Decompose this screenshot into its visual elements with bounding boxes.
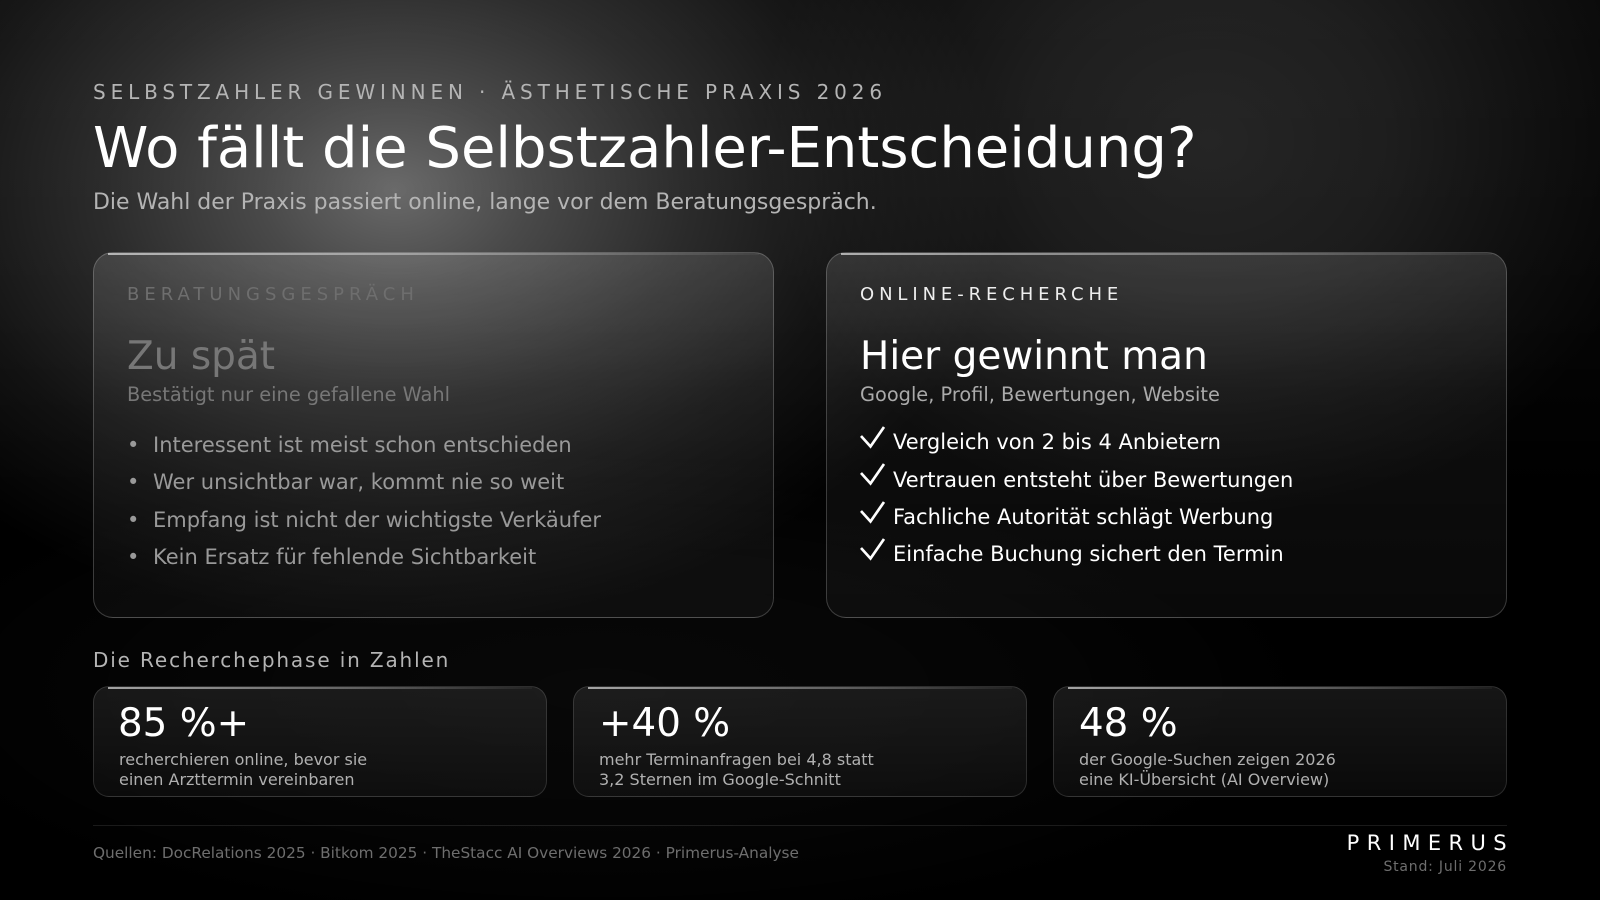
check item: Vergleich von 2 bis 4 Anbietern: [893, 430, 1221, 454]
check item: Vertrauen entsteht über Bewertungen: [893, 468, 1293, 492]
bullet item: Interessent ist meist schon entschieden: [153, 433, 572, 457]
title: Wo fällt die Selbstzahler-Entscheidung?: [93, 116, 1197, 181]
stat description: mehr Terminanfragen bei 4,8 statt: [599, 750, 874, 769]
subtitle: Die Wahl der Praxis passiert online, lange vor dem Beratungsgespräch.: [93, 190, 877, 215]
bullet item: Kein Ersatz für fehlende Sichtbarkeit: [153, 545, 536, 569]
stat description: der Google-Suchen zeigen 2026: [1079, 750, 1336, 769]
panel subheading: Bestätigt nur eine gefallene Wahl: [127, 383, 450, 406]
card highlight: [1068, 687, 1492, 689]
bullet item: •: [127, 433, 139, 457]
stat description: eine KI-Übersicht (AI Overview): [1079, 770, 1329, 789]
panel: Beratungsgespräch: [93, 252, 774, 618]
stat value: 85 %+: [118, 701, 249, 746]
stat description: 3,2 Sternen im Google-Schnitt: [599, 770, 841, 789]
stat value: 48 %: [1079, 701, 1178, 746]
brand: PRIMERUS: [1347, 831, 1514, 855]
eyebrow: SELBSTZAHLER GEWINNEN · ÄSTHETISCHE PRAXIS 2026: [93, 80, 887, 104]
bullet list: [127, 433, 601, 569]
card highlight: [108, 687, 532, 689]
panel label: ONLINE-RECHERCHE: [860, 284, 1123, 305]
stat value: +40 %: [599, 701, 730, 746]
stat description: [599, 750, 874, 789]
stat description: [1079, 750, 1336, 789]
check item: Fachliche Autorität schlägt Werbung: [893, 505, 1273, 529]
card highlight: [108, 253, 759, 255]
panel: Online-Recherche: [826, 252, 1507, 618]
stat card: 48 %: [1053, 686, 1507, 797]
stat card: +40 %: [573, 686, 1027, 797]
stat card: 85 %+: [93, 686, 547, 797]
bullet item: •: [127, 470, 139, 494]
date: Stand: Juli 2026: [1383, 859, 1507, 875]
check item: Einfache Buchung sichert den Termin: [893, 542, 1284, 566]
stat description: recherchieren online, bevor sie: [119, 750, 367, 769]
sources: Quellen: DocRelations 2025 · Bitkom 2025 · TheStacc AI Overviews 2026 · Primerus-Analyse: [93, 844, 799, 862]
check list: [860, 426, 1293, 566]
bullet item: •: [127, 508, 139, 532]
bullet item: Empfang ist nicht der wichtigste Verkäufer: [153, 508, 601, 532]
panel label: BERATUNGSGESPRÄCH: [127, 284, 419, 305]
panel heading: Hier gewinnt man: [860, 334, 1208, 379]
bullet item: Wer unsichtbar war, kommt nie so weit: [153, 470, 564, 494]
card highlight: [588, 687, 1012, 689]
card highlight: [841, 253, 1492, 255]
stat description: [119, 750, 367, 789]
stat description: einen Arzttermin vereinbaren: [119, 770, 355, 789]
bullet item: •: [127, 545, 139, 569]
section heading: Die Recherchephase in Zahlen: [93, 648, 450, 672]
panel heading: Zu spät: [127, 334, 275, 379]
panel subheading: Google, Profil, Bewertungen, Website: [860, 383, 1220, 406]
